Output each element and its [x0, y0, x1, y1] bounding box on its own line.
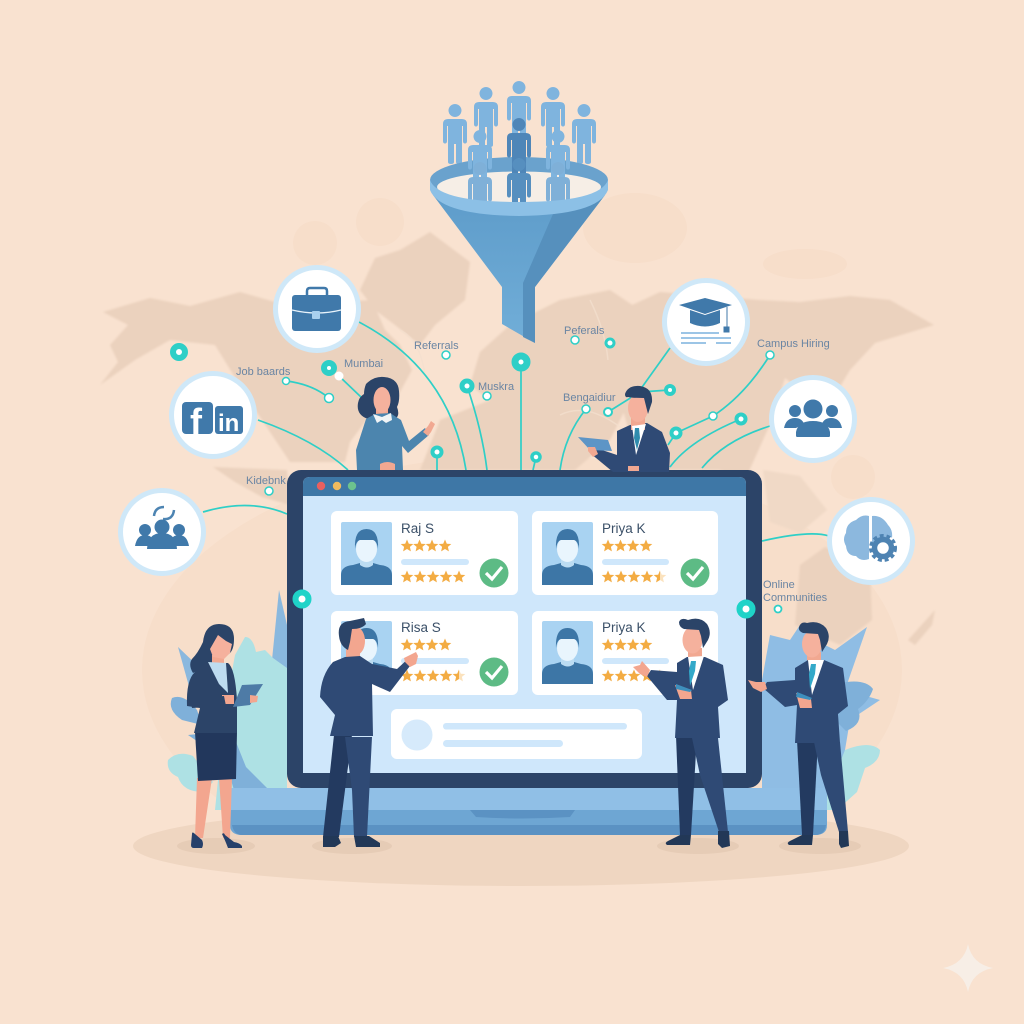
window dots — [317, 482, 356, 490]
icon badge: briefcase — [276, 268, 358, 350]
North America — [100, 292, 412, 462]
tie — [634, 428, 640, 450]
jacket — [590, 423, 670, 472]
icon badge: facebook and linkedin: f — [190, 401, 203, 442]
map location dots — [173, 336, 782, 612]
candidate card: Priya K second: Priya K — [602, 620, 646, 635]
shadow — [657, 838, 739, 854]
suit — [647, 657, 728, 738]
skirt — [195, 732, 237, 781]
woman presenter behind laptop — [356, 377, 435, 470]
face — [210, 635, 232, 659]
far leg — [676, 736, 697, 835]
icon badge: facebook and linkedin: in — [218, 410, 239, 437]
tablet — [233, 684, 263, 707]
laptop base shadow band — [232, 825, 826, 835]
icon badge: AI brain and gear — [830, 500, 912, 582]
Asia — [600, 292, 934, 480]
icon badge: referral group — [120, 490, 204, 574]
neck — [212, 655, 224, 666]
blouse — [208, 662, 228, 693]
man in suit with phone — [633, 619, 739, 854]
hand — [423, 421, 435, 436]
laptop — [230, 470, 827, 835]
head — [682, 626, 702, 654]
faint background blobs — [142, 193, 902, 885]
map labels: Peferals — [564, 325, 605, 337]
neck — [688, 648, 702, 660]
head — [347, 627, 365, 655]
world map — [100, 232, 935, 645]
open hand — [748, 680, 767, 692]
hair — [358, 377, 399, 419]
map labels — [236, 325, 830, 604]
candidate card: Risa S: Risa S — [401, 620, 441, 635]
hands — [588, 447, 639, 471]
collar — [373, 413, 392, 423]
candidates entering funnel — [468, 118, 570, 222]
funnel rim back — [430, 157, 608, 203]
laptop bezel — [287, 470, 762, 788]
shoes — [323, 836, 380, 847]
laptop screen — [303, 477, 746, 773]
tablet — [578, 437, 612, 451]
summary bar — [391, 709, 642, 759]
left foliage — [168, 590, 287, 810]
New Zealand — [908, 610, 935, 645]
face — [374, 387, 390, 413]
shirt — [632, 424, 646, 455]
Central and South America — [213, 467, 290, 505]
neck — [807, 652, 821, 664]
funnel inner opening — [437, 172, 601, 202]
neck — [631, 416, 645, 430]
suit — [763, 660, 848, 743]
near leg — [345, 737, 372, 837]
phone hand — [796, 693, 812, 708]
shirt — [808, 660, 824, 695]
candidate card: Raj S — [331, 511, 518, 595]
far leg — [797, 740, 818, 835]
laptop notch — [470, 810, 575, 818]
South East Asia — [763, 470, 827, 533]
Europe and Africa — [420, 290, 640, 470]
laptop teal nodes — [296, 592, 752, 616]
sparkle watermark — [943, 944, 993, 992]
man in suit at right — [748, 622, 861, 854]
candidate card: Raj S: Raj S — [401, 521, 434, 536]
icon badge: team — [772, 378, 854, 460]
man pointing at screen — [312, 618, 418, 854]
phone hand — [675, 685, 692, 699]
map labels: Mumbai — [344, 358, 383, 370]
funnel with candidates — [430, 81, 608, 343]
near leg — [814, 742, 848, 832]
map light rivers — [400, 300, 630, 435]
face — [628, 394, 648, 422]
hands — [222, 695, 258, 704]
candidates at back — [443, 81, 596, 164]
hair — [679, 619, 710, 648]
right foliage — [762, 625, 880, 810]
laptop base upper — [230, 788, 827, 810]
tie — [809, 664, 816, 689]
map labels: Online — [763, 579, 795, 591]
hand — [404, 652, 418, 667]
shadow — [177, 838, 255, 854]
icon badge: graduation cap — [664, 280, 748, 364]
map labels: Communities — [763, 592, 828, 604]
icon badge: facebook and linkedin — [172, 374, 254, 456]
near leg — [692, 738, 728, 832]
Greenland — [360, 232, 470, 345]
hair — [190, 624, 234, 673]
shoes — [191, 832, 242, 848]
shoes — [788, 831, 849, 848]
head — [802, 630, 822, 658]
neck — [376, 406, 388, 417]
map labels: Bengaidiur — [563, 392, 616, 404]
connection lines — [203, 322, 829, 541]
hair — [799, 622, 829, 652]
shoes — [666, 831, 730, 848]
map labels: Kidebnk — [246, 475, 286, 487]
map labels: Referrals — [414, 340, 459, 352]
title bar — [303, 477, 746, 496]
shirt — [688, 656, 704, 690]
man presenter behind laptop — [578, 386, 670, 472]
funnel shaded side — [523, 195, 605, 343]
hair — [339, 618, 366, 650]
shadow — [312, 838, 392, 854]
funnel rim band — [430, 180, 608, 216]
jacket — [187, 663, 237, 733]
blouse body — [356, 413, 429, 470]
map labels: Job baards — [236, 366, 291, 378]
suit — [320, 656, 413, 736]
map labels: Campus Hiring — [757, 338, 830, 350]
ground ellipse — [133, 806, 909, 886]
hair — [625, 386, 652, 414]
forearm — [190, 696, 226, 708]
candidate card: Priya K — [532, 511, 718, 595]
legs — [195, 778, 232, 838]
candidate card: Priya K: Priya K — [602, 521, 646, 536]
map labels: Muskra — [478, 381, 515, 393]
neck — [346, 646, 360, 660]
laptop base — [230, 810, 827, 835]
candidate card: Risa S — [331, 611, 518, 695]
far leg — [323, 735, 352, 837]
pointing hand — [633, 661, 650, 677]
lower hand — [380, 462, 395, 470]
woman with tablet — [177, 624, 263, 854]
Australia — [795, 547, 872, 645]
candidate card: Priya K second — [532, 611, 718, 695]
shadow — [779, 838, 861, 854]
funnel cone and spout — [433, 195, 605, 343]
tie — [689, 661, 696, 686]
